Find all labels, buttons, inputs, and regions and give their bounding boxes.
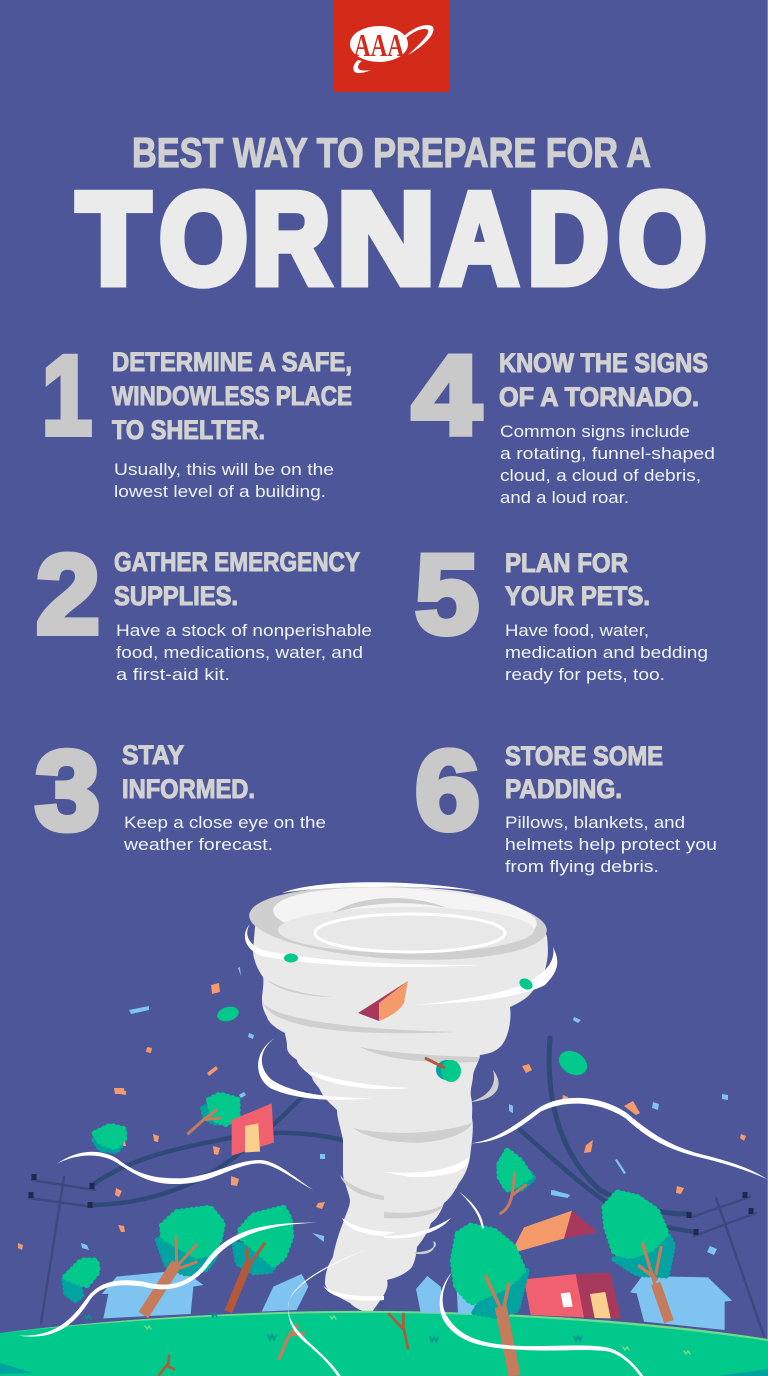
step 4 — [412, 333, 715, 507]
step 4: cloud, a cloud of debris, — [500, 466, 701, 485]
step 6: 6 — [415, 728, 480, 853]
ground — [0, 1311, 768, 1376]
step 1: 1 — [42, 333, 92, 458]
debris on tornado — [216, 954, 591, 1082]
step 1: Usually, this will be on the — [114, 460, 334, 479]
title: O — [618, 167, 706, 311]
title: D — [528, 167, 609, 311]
step 2: SUPPLIES. — [114, 581, 238, 611]
step 5: 5 — [415, 532, 479, 657]
step 4: KNOW THE SIGNS — [499, 348, 708, 378]
step 2: food, medications, water, and — [116, 643, 363, 662]
step 5: ready for pets, too. — [505, 665, 665, 684]
step 6: STORE SOME — [505, 741, 663, 771]
step 1: TO SHELTER. — [112, 415, 265, 445]
step 1: DETERMINE A SAFE, — [112, 347, 352, 377]
step 4: OF A TORNADO. — [499, 382, 699, 412]
step 2: 2 — [36, 532, 100, 657]
step 5: YOUR PETS. — [505, 581, 650, 611]
step 6: Pillows, blankets, and — [505, 813, 685, 832]
logo: AAA: AAA — [354, 27, 404, 63]
step 6: PADDING. — [505, 774, 622, 804]
step 3: 3 — [35, 728, 100, 853]
step 3: weather forecast. — [123, 835, 273, 854]
step 4: a rotating, funnel-shaped — [500, 444, 715, 463]
step 2: a first-aid kit. — [116, 665, 230, 684]
power lines and poles — [29, 1038, 764, 1336]
title: N — [337, 167, 435, 311]
step 6: helmets help protect you — [505, 835, 717, 854]
left trees, houses and wind — [17, 1152, 367, 1376]
confetti debris — [18, 983, 746, 1273]
step 5: medication and bedding — [505, 643, 708, 662]
step 1: lowest level of a building. — [114, 482, 326, 501]
grass tufts — [85, 1313, 690, 1354]
step 3: Keep a close eye on the — [124, 813, 326, 832]
step 5 — [415, 532, 708, 684]
step 3 — [35, 728, 326, 854]
step 4: and a loud roar. — [500, 488, 629, 507]
tornado — [245, 879, 557, 1312]
step 5: Have food, water, — [505, 621, 649, 640]
logo: AAA — [333, 0, 450, 92]
title — [77, 129, 706, 311]
right trees, houses and wind — [389, 1098, 767, 1376]
title: O — [160, 167, 248, 311]
step 1 — [42, 333, 352, 501]
step 6 — [415, 728, 717, 876]
step 2: Have a stock of nonperishable — [116, 621, 372, 640]
title: T — [77, 167, 150, 311]
step 3: STAY — [122, 740, 184, 770]
title: R — [252, 167, 330, 311]
step 2 — [36, 532, 372, 684]
title: BEST WAY TO PREPARE FOR A — [132, 129, 651, 176]
flying tree and house left — [94, 1095, 274, 1156]
step 4: Common signs include — [500, 422, 690, 441]
step 6: from flying debris. — [505, 857, 659, 876]
step 2: GATHER EMERGENCY — [114, 547, 360, 577]
step 1: WINDOWLESS PLACE — [112, 381, 352, 411]
step 3: INFORMED. — [122, 774, 255, 804]
illustration: tornado scene — [0, 879, 768, 1376]
title: A — [441, 167, 518, 311]
step 5: PLAN FOR — [505, 548, 628, 578]
step 4: 4 — [412, 333, 481, 458]
